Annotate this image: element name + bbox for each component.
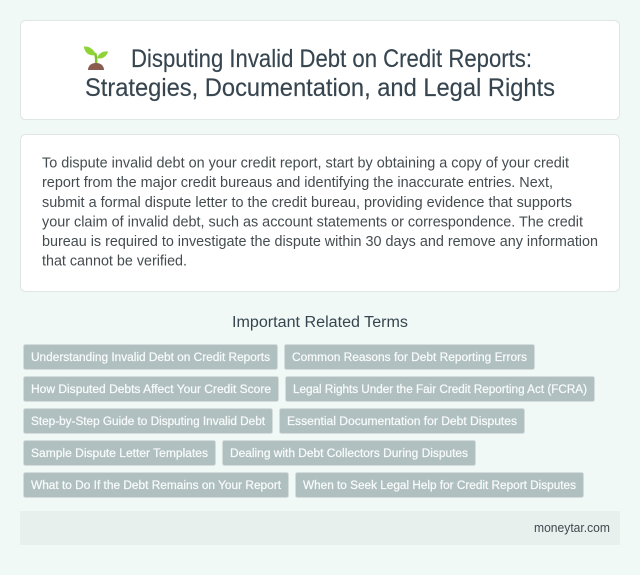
paragraph: To dispute invalid debt on your credit report, start by obtaining a copy of your credit [42,156,569,172]
heading [85,45,555,102]
tag: Essential Documentation for Debt Disputes [287,414,517,428]
tag: Legal Rights Under the Fair Credit Reporting Act (FCRA) [293,382,587,396]
tag [296,472,584,498]
tag [24,376,278,402]
panel: summary text [20,134,620,292]
tag [286,376,594,402]
tag [24,344,278,370]
tag [280,408,524,434]
heading: Strategies, Documentation, and Legal Rights [85,74,555,102]
tag: Step-by-Step Guide to Disputing Invalid Debt [31,414,266,428]
footer: moneytar.com [534,521,610,535]
paragraph: that cannot be verified. [42,254,187,270]
tag [24,440,216,466]
panel: title [20,20,620,120]
heading: Disputing Invalid Debt on Credit Reports: [131,45,532,73]
tag [222,440,476,466]
tag list [24,344,594,498]
heading: related terms: Important Related Terms [232,314,408,331]
tag: Common Reasons for Debt Reporting Errors [292,350,527,364]
tag: Dealing with Debt Collectors During Disputes [230,446,468,460]
tag: What to Do If the Debt Remains on Your Report [31,478,282,492]
paragraph: your claim of invalid debt, such as account statements or correspondence. The credit [42,214,583,230]
tag [24,472,288,498]
paragraph [42,156,598,270]
footer [20,511,620,545]
tag: How Disputed Debts Affect Your Credit Score [31,382,271,396]
icon: seedling [84,46,108,70]
tag [24,408,272,434]
tag: When to Seek Legal Help for Credit Report Disputes [303,478,576,492]
paragraph: bureau is required to investigate the dispute within 30 days and remove any information [42,234,598,250]
paragraph: report from the major credit bureaus and identifying the inaccurate entries. Next, [42,175,553,191]
tag: Understanding Invalid Debt on Credit Reports [31,350,270,364]
tag: Sample Dispute Letter Templates [31,446,208,460]
tag [284,344,534,370]
paragraph: submit a formal dispute letter to the credit bureau, providing evidence that supports [42,195,572,211]
